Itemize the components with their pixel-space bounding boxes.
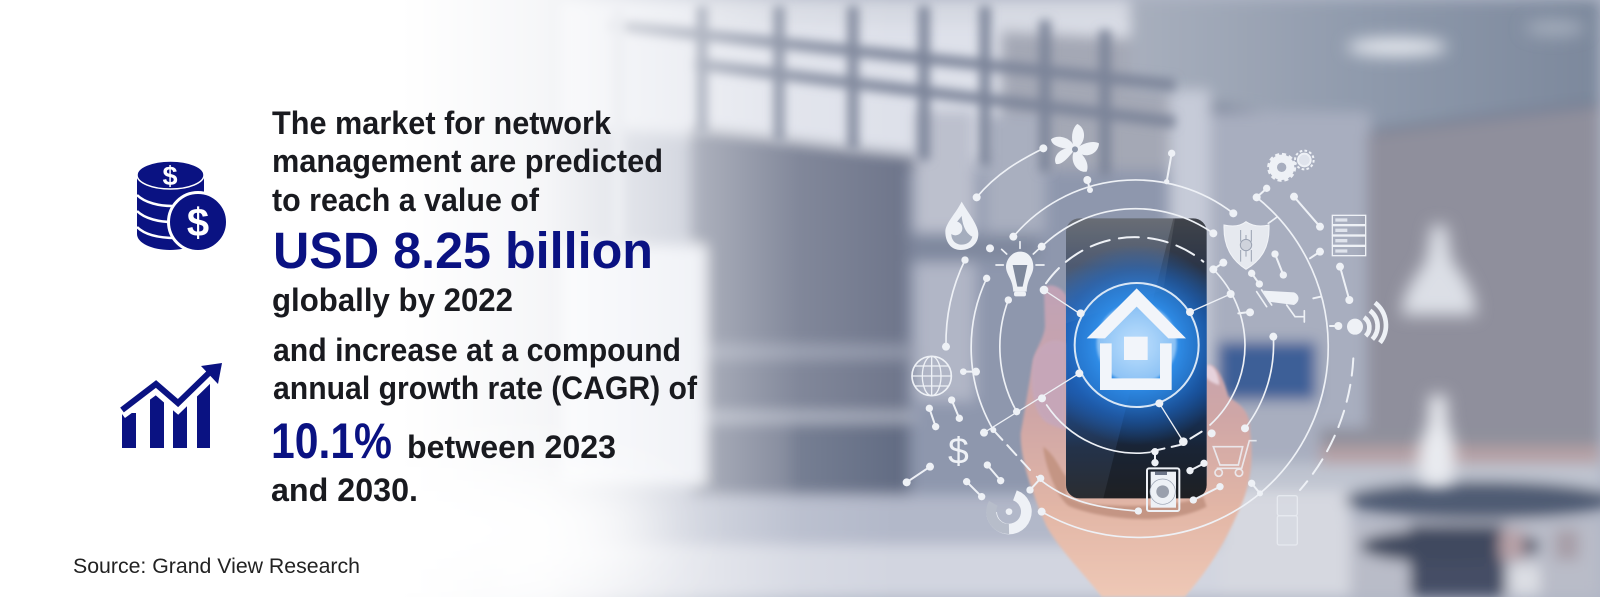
TV	[1218, 342, 1316, 400]
icon: shield	[1224, 217, 1277, 269]
text block: growth rate statement: annual growth rate (CAGR) of	[273, 370, 697, 406]
smart home graphic: hand, phone and network rings	[903, 124, 1386, 597]
window frames	[610, 6, 1175, 240]
icon: dollar sign: $	[948, 429, 969, 471]
text block: market value statement: management are predicted	[272, 143, 663, 179]
icon: globe	[912, 356, 951, 396]
text block: market value statement: The market for network	[272, 105, 611, 141]
dark ceiling edge	[1210, 106, 1600, 134]
icon: light bulb	[996, 242, 1044, 296]
ceiling lamp	[1347, 38, 1447, 56]
icon: refrigerator	[1277, 496, 1297, 545]
light top band	[700, 0, 1140, 24]
highlight: USD 8.25 billion: USD 8.25 billion	[273, 222, 653, 279]
text block: market value statement: globally by 2022	[272, 282, 513, 318]
table	[1345, 481, 1600, 519]
ceiling right	[1130, 0, 1600, 130]
dark cabinet block	[691, 128, 915, 500]
icon: house	[1087, 288, 1186, 390]
hand behind phone	[1021, 285, 1252, 597]
icon: stack of dollar coins: $	[162, 161, 178, 191]
floor	[560, 495, 1220, 545]
right wall	[1367, 106, 1600, 440]
text block: market value statement	[272, 105, 663, 318]
icon: security camera	[1257, 290, 1304, 322]
icon: server racks	[1332, 215, 1366, 256]
text block: market value statement: to reach a value of	[272, 182, 539, 218]
icon: donut target	[987, 489, 1031, 534]
fingertip over phone	[1032, 340, 1065, 430]
floor right	[1220, 490, 1350, 597]
text block: growth rate statement	[271, 332, 697, 508]
window wall	[560, 0, 1175, 175]
icon: fan	[1051, 124, 1099, 172]
bar with pink stripe	[1320, 428, 1600, 446]
source note: Source: Grand View Research	[73, 555, 360, 578]
icon: water drop	[945, 202, 978, 250]
icon: stack of dollar coins: $	[187, 201, 209, 245]
text block: growth rate statement: and 2030.	[271, 472, 418, 508]
icon: wifi	[1347, 303, 1386, 343]
icon: washing machine	[1147, 468, 1179, 511]
phone	[1066, 218, 1207, 498]
network rings	[903, 144, 1353, 537]
text block: growth rate statement: between 2023	[407, 429, 616, 465]
icon: gears	[1269, 151, 1314, 180]
vase	[1418, 395, 1455, 485]
pale wall and pillar	[1170, 90, 1210, 460]
pendant lamp	[1402, 225, 1476, 315]
icon: rising bar chart with arrow	[122, 363, 222, 448]
highlight: 10.1%: 10.1%	[271, 413, 392, 469]
icon: stack of dollar coins	[137, 161, 228, 252]
text block: growth rate statement: and increase at a compound	[273, 332, 681, 368]
icon: shopping cart	[1213, 441, 1257, 476]
house circle and glow	[1075, 283, 1199, 407]
